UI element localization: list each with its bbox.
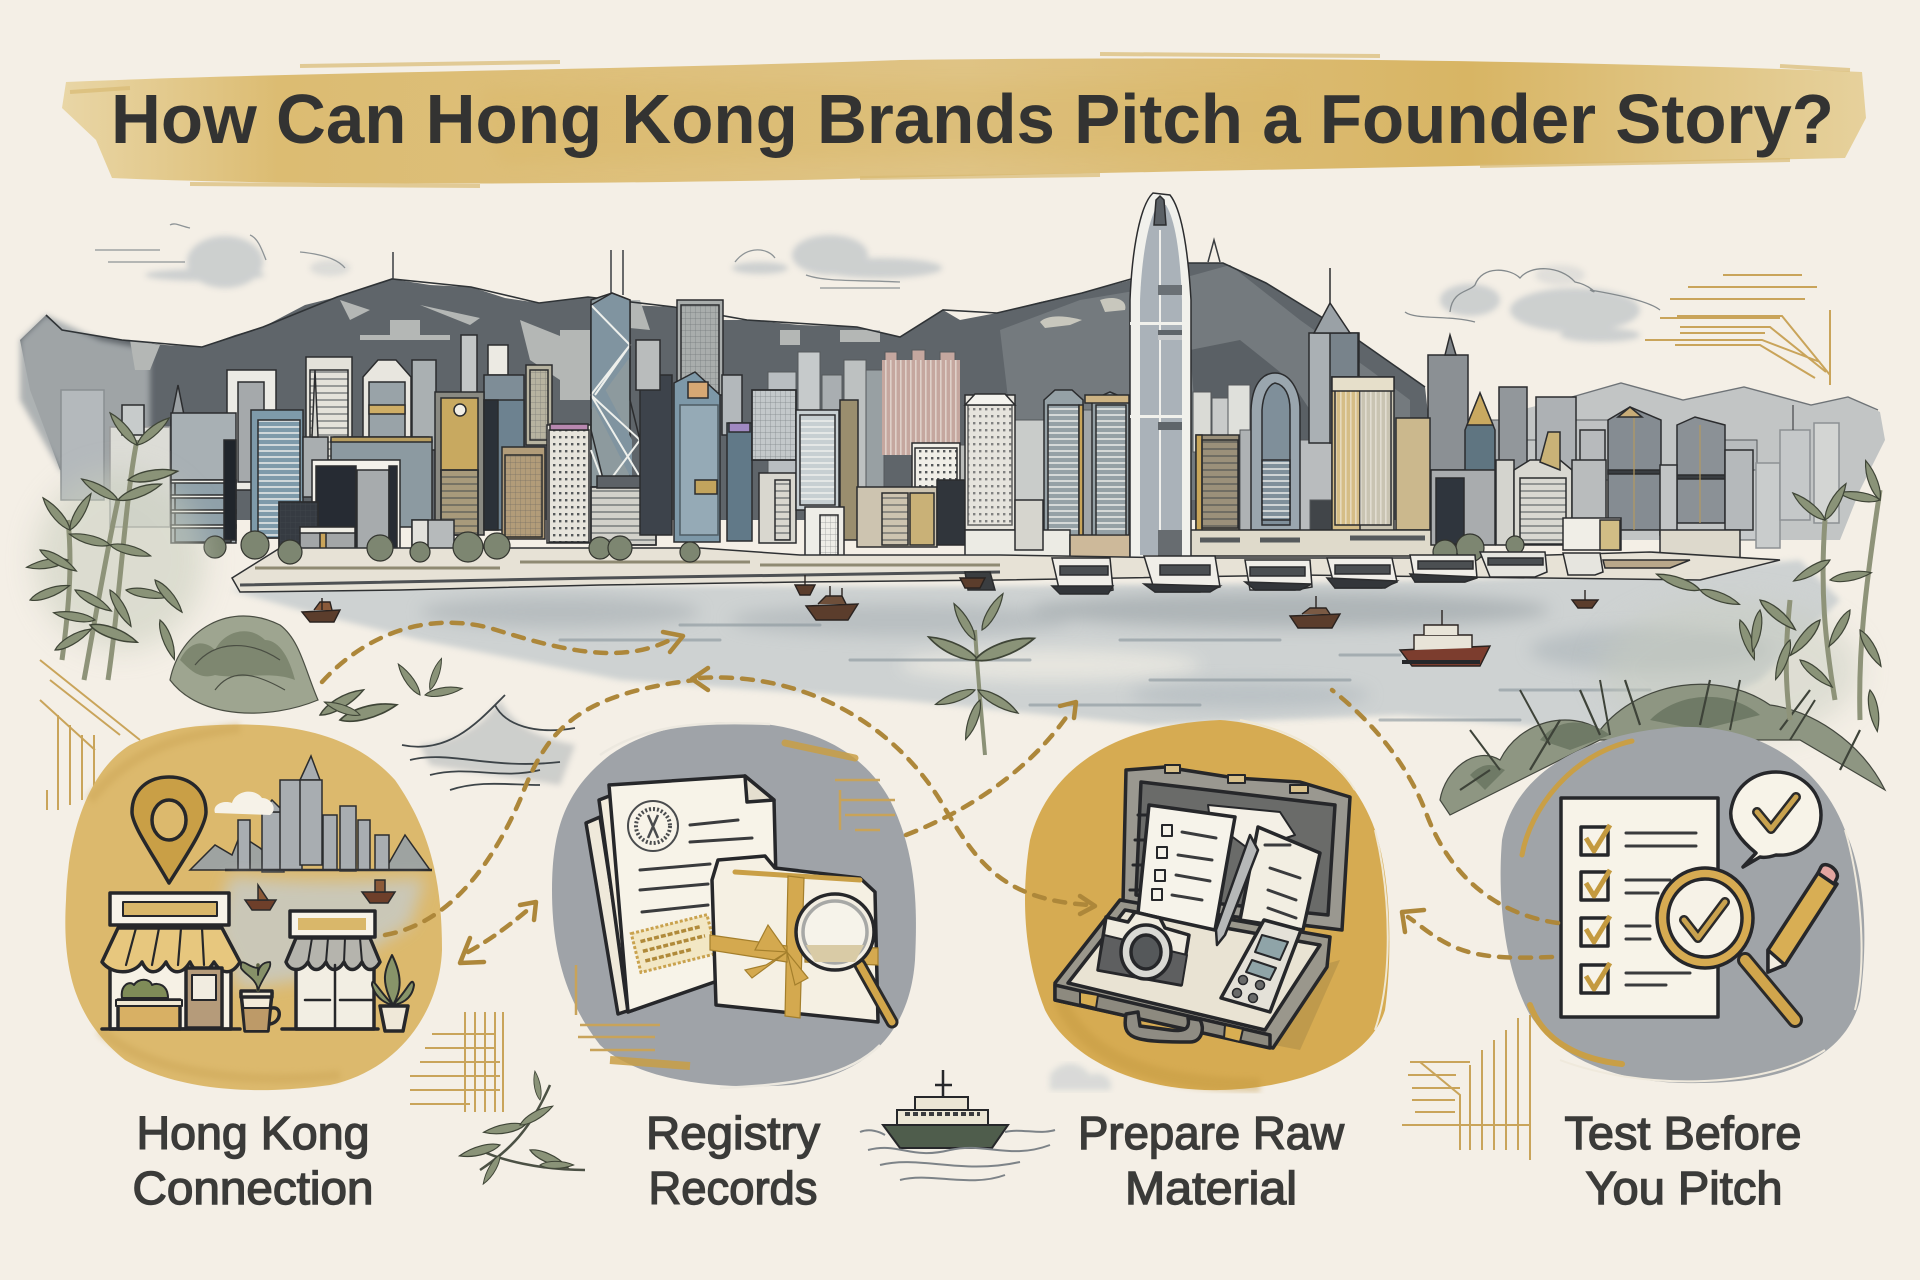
arrow: top of route	[692, 668, 708, 690]
small bamboo sprig	[458, 1071, 585, 1186]
dashed route: test back across	[1332, 690, 1558, 923]
foliage left	[35, 470, 463, 726]
hatch: between panels 1 and 2	[410, 1012, 503, 1112]
magnifier	[796, 894, 892, 1022]
title: How Can Hong Kong Brands Pitch a Founder Story?	[111, 80, 1834, 158]
checkboxes	[1581, 825, 1610, 993]
skyline: right district	[965, 193, 1839, 562]
bamboo left	[26, 410, 185, 680]
mini cloud	[215, 792, 274, 815]
panel: prepare raw material	[1025, 720, 1389, 1090]
folder	[712, 856, 878, 1022]
waterfront promenade	[204, 531, 1780, 592]
bamboo centre	[926, 591, 1036, 755]
harbour boats	[302, 575, 1598, 666]
foliage right	[1440, 600, 1885, 815]
recorder	[1221, 920, 1301, 1012]
label: registry records: Registry	[646, 1107, 820, 1159]
gold hatching left	[40, 660, 140, 810]
case base	[1055, 900, 1330, 1048]
arrow: into raw material	[1402, 910, 1424, 932]
skyline: infill towers	[768, 350, 1758, 545]
harbour water	[230, 560, 1840, 735]
panel: hong kong connection	[65, 724, 442, 1090]
label: hong kong connection: Connection	[132, 1162, 374, 1214]
distant mountains right	[1470, 383, 1885, 540]
mini water	[215, 875, 425, 990]
magnifier	[1657, 868, 1795, 1020]
title brush band	[62, 54, 1866, 186]
clouds	[95, 224, 1660, 342]
speech bubble	[1731, 772, 1821, 867]
ribbon	[710, 876, 878, 1018]
peak hills	[20, 240, 1440, 520]
label: hong kong connection	[132, 1107, 374, 1214]
panel: registry records	[552, 722, 916, 1088]
pencil	[1768, 865, 1837, 972]
gold stamp	[631, 915, 717, 972]
moored ferries	[965, 552, 1690, 594]
checklist page	[1561, 798, 1718, 1017]
ink wave	[402, 695, 575, 790]
dashed route: shore to harbour	[322, 623, 670, 682]
gold hatching top right	[1645, 275, 1830, 385]
label: prepare raw material: Material	[1125, 1162, 1297, 1214]
dashed route: registry to raw material	[906, 712, 1070, 835]
dashed route: back across the harbour to raw material	[700, 677, 1090, 905]
boats	[245, 880, 395, 910]
hatch: between panels 3 and 4	[1402, 1015, 1530, 1160]
potted plant	[372, 955, 414, 1031]
paper back	[1208, 805, 1295, 850]
label: prepare raw material	[1078, 1107, 1345, 1214]
double arrow between first and second step	[460, 902, 536, 963]
briefcase	[1055, 765, 1350, 1050]
checklist lines	[1626, 833, 1696, 985]
takeaway cup	[241, 962, 279, 1031]
panel: test before you pitch	[1501, 727, 1864, 1083]
shop left	[102, 893, 240, 1029]
label: hong kong connection: Hong Kong	[136, 1107, 370, 1159]
label: test before you pitch	[1564, 1107, 1802, 1214]
bamboo right	[1655, 459, 1885, 732]
skyline: left district	[61, 293, 965, 569]
notebook	[1138, 805, 1235, 930]
dashed route: test to raw material	[1408, 917, 1552, 958]
camera	[1098, 912, 1189, 985]
label: prepare raw material: Prepare Raw	[1078, 1107, 1345, 1159]
shop right	[282, 911, 380, 1029]
label: registry records: Records	[648, 1162, 818, 1214]
label: registry records	[646, 1107, 820, 1214]
label: test before you pitch: Test Before	[1564, 1107, 1802, 1159]
label: test before you pitch: You Pitch	[1586, 1162, 1782, 1214]
seal	[628, 801, 678, 851]
paper right	[1240, 827, 1320, 930]
pen	[1216, 835, 1258, 945]
arrow: top right of route	[1060, 702, 1076, 718]
document stack	[586, 776, 778, 1014]
arrow: raw material point	[1080, 896, 1095, 914]
document lines	[640, 820, 752, 932]
mini skyline	[190, 756, 432, 872]
dashed route: shop to registry	[385, 680, 695, 935]
arrow: harbour	[663, 632, 683, 652]
small ferry and waves	[860, 1064, 1111, 1180]
pin	[132, 777, 206, 883]
